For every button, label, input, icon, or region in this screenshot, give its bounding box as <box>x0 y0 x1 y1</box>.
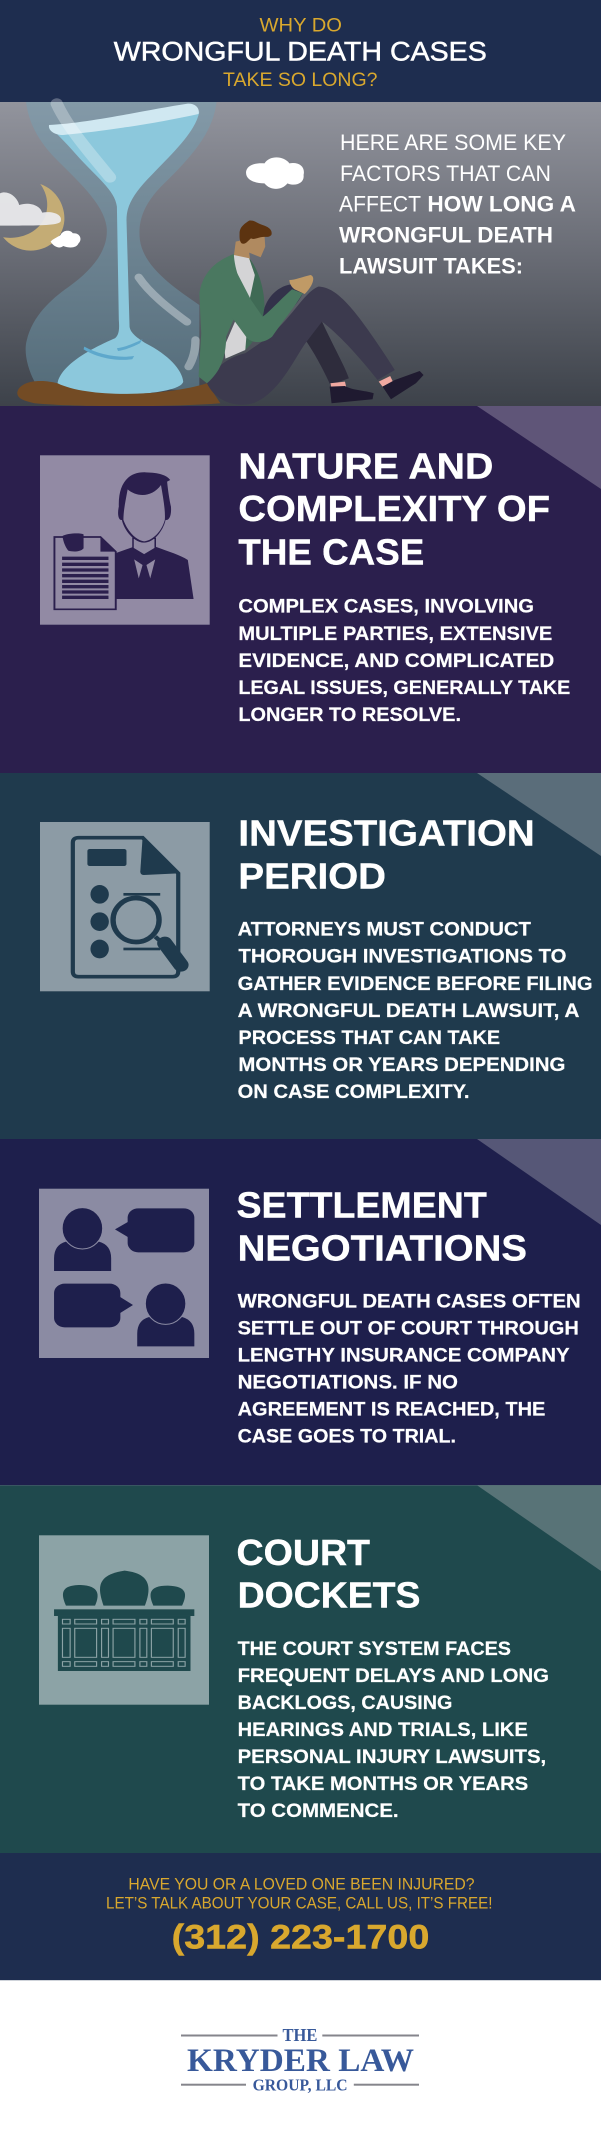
panel: hero illustration <box>0 102 601 406</box>
panel: court dockets <box>0 1485 601 1853</box>
text block: TO COMMENCE. <box>238 1800 399 1822</box>
icon: two people talking <box>39 1189 209 1358</box>
heading <box>238 445 550 572</box>
panel: footer logo <box>0 1980 601 2140</box>
text block: TO TAKE MONTHS OR YEARS <box>238 1773 528 1795</box>
panel: header <box>0 0 601 102</box>
heading: COURT <box>236 1532 370 1573</box>
heading: NATURE AND <box>238 445 493 486</box>
text block: intro: AFFECT <box>339 192 421 217</box>
icon: document with magnifying glass <box>40 822 210 991</box>
panel: nature and complexity <box>0 406 601 773</box>
text block: SETTLE OUT OF COURT THROUGH <box>238 1318 579 1340</box>
text block: PERSONAL INJURY LAWSUITS, <box>238 1746 546 1768</box>
text block: AGREEMENT IS REACHED, THE <box>238 1399 545 1421</box>
text block: EVIDENCE, AND COMPLICATED <box>238 650 554 672</box>
logo: The Kryder Law Group: THE <box>282 2025 317 2045</box>
text block: COMPLEX CASES, INVOLVING <box>238 596 534 618</box>
title: WHY DO <box>260 15 342 37</box>
text block: THOROUGH INVESTIGATIONS TO <box>238 946 566 968</box>
icon: crescent moon and clouds <box>0 157 304 251</box>
heading: DOCKETS <box>238 1575 420 1616</box>
text block: PROCESS THAT CAN TAKE <box>238 1027 500 1049</box>
heading: PERIOD <box>238 856 386 897</box>
text block: intro: HERE ARE SOME KEY <box>340 130 566 155</box>
icon: sitting man <box>199 221 424 405</box>
text block: call to action: HAVE YOU OR A LOVED ONE BEEN INJURED? <box>128 1874 474 1893</box>
panel: investigation period <box>0 773 601 1139</box>
text block: LEGAL ISSUES, GENERALLY TAKE <box>238 677 570 699</box>
text block: HEARINGS AND TRIALS, LIKE <box>238 1719 528 1741</box>
text block: ATTORNEYS MUST CONDUCT <box>238 919 531 941</box>
text block: call to action <box>106 1874 492 1913</box>
text block: intro: LAWSUIT TAKES: <box>339 254 523 279</box>
text block <box>238 1638 549 1822</box>
heading: COMPLEXITY OF <box>238 488 550 529</box>
text block: intro: FACTORS THAT CAN <box>340 161 551 186</box>
icon: lawyer holding document <box>40 455 210 625</box>
heading <box>236 1532 420 1616</box>
text block: ON CASE COMPLEXITY. <box>238 1081 470 1103</box>
text block: CASE GOES TO TRIAL. <box>238 1426 456 1448</box>
logo: The Kryder Law Group: GROUP, LLC <box>253 2076 348 2095</box>
text block: BACKLOGS, CAUSING <box>238 1692 452 1714</box>
heading: SETTLEMENT <box>236 1185 487 1226</box>
title: TAKE SO LONG? <box>223 69 378 91</box>
text block: intro <box>339 130 576 279</box>
text block: LONGER TO RESOLVE. <box>238 704 461 726</box>
heading: NEGOTIATIONS <box>238 1228 527 1269</box>
text block <box>238 1291 581 1448</box>
text block: A WRONGFUL DEATH LAWSUIT, A <box>238 1000 580 1022</box>
text block: intro: HOW LONG A <box>427 192 576 217</box>
text block: call to action: LET’S TALK ABOUT YOUR CASE, CALL US, IT’S FREE! <box>106 1894 492 1913</box>
logo: The Kryder Law Group <box>181 2025 419 2095</box>
panel: call to action <box>0 1853 601 1980</box>
logo: The Kryder Law Group: KRYDER LAW <box>187 2043 414 2079</box>
heading: THE CASE <box>238 531 424 572</box>
title <box>114 15 487 91</box>
icon: hourglass <box>17 102 220 406</box>
heading <box>238 812 535 897</box>
text block: WRONGFUL DEATH CASES OFTEN <box>238 1291 581 1313</box>
text block: MULTIPLE PARTIES, EXTENSIVE <box>238 623 552 645</box>
text block: intro: WRONGFUL DEATH <box>339 223 553 248</box>
title: WRONGFUL DEATH CASES <box>114 37 487 67</box>
icon: judges bench <box>39 1535 209 1705</box>
phone number: (312) 223-1700 <box>172 1919 429 1957</box>
text block: GATHER EVIDENCE BEFORE FILING <box>238 973 593 995</box>
text block: NEGOTIATIONS. IF NO <box>238 1372 458 1394</box>
heading <box>236 1185 527 1269</box>
heading: INVESTIGATION <box>238 812 535 853</box>
text block: LENGTHY INSURANCE COMPANY <box>238 1345 570 1367</box>
text block <box>238 596 570 726</box>
panel: settlement negotiations <box>0 1139 601 1485</box>
text block <box>238 919 593 1103</box>
text block: THE COURT SYSTEM FACES <box>238 1638 511 1660</box>
text block: FREQUENT DELAYS AND LONG <box>238 1665 549 1687</box>
text block: MONTHS OR YEARS DEPENDING <box>238 1054 565 1076</box>
